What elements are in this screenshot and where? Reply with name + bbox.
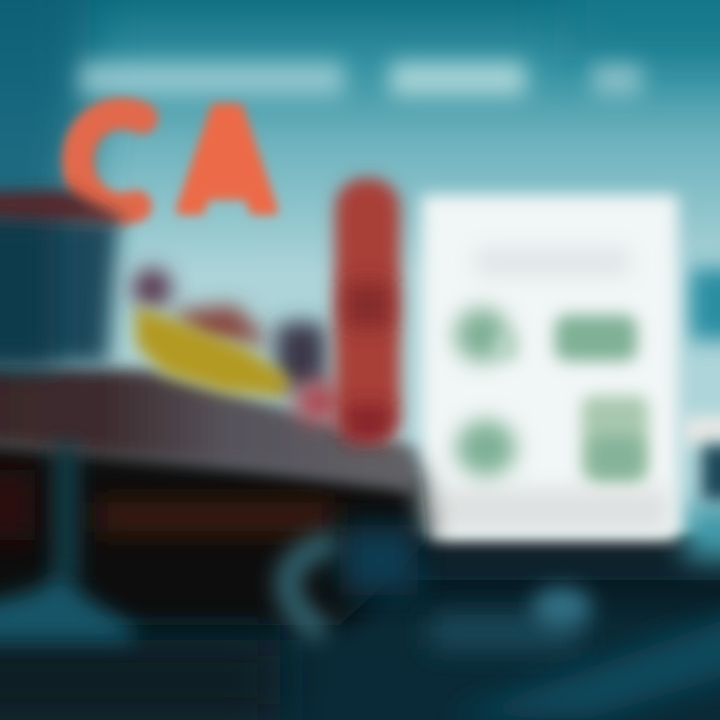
canopy [0, 362, 416, 492]
large CA letters [78, 77, 277, 242]
white panel with green charts [422, 195, 678, 539]
orange interior glow [95, 502, 335, 532]
green chart: bottom right [582, 396, 648, 480]
panel grey lower band [432, 488, 670, 532]
red pillar sign [335, 178, 400, 443]
purple sign bits [132, 268, 172, 308]
large CA letters: A [177, 77, 277, 242]
green chart: top left [455, 308, 509, 362]
green chart: top right [555, 315, 637, 361]
panel heading band [475, 248, 630, 276]
dark ground and road [0, 416, 720, 720]
title band (illegible in the reference) [80, 62, 642, 96]
car right highlight [532, 587, 592, 627]
car centre arc [288, 545, 325, 628]
round tower [0, 212, 118, 364]
car centre body [340, 525, 418, 595]
car left [0, 572, 135, 642]
yellow sign [136, 306, 290, 396]
lamp stem [54, 445, 78, 580]
lower storefront [0, 430, 428, 625]
green chart: bottom left [456, 420, 516, 476]
red lower sign [294, 380, 342, 424]
tower roof [0, 190, 125, 224]
panel sheet [422, 195, 678, 539]
teal car shapes [0, 445, 592, 642]
diner building [0, 178, 428, 720]
